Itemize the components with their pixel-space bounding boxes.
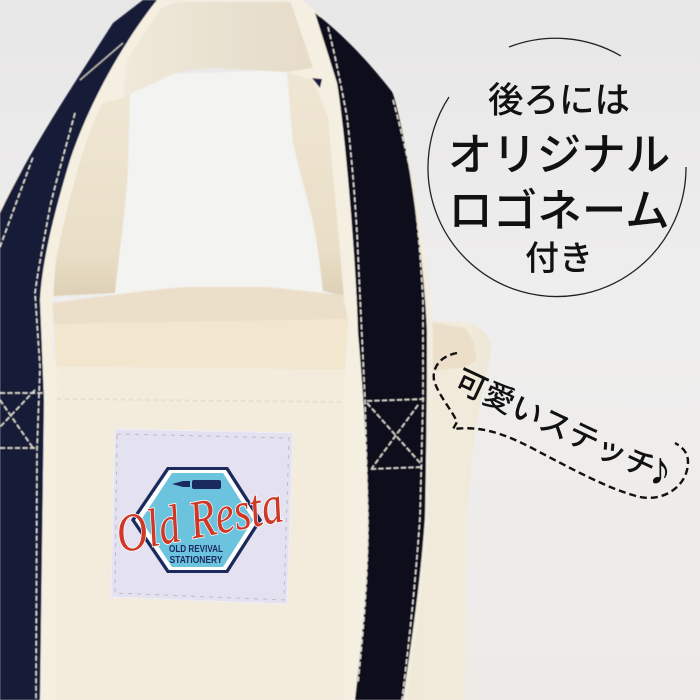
left cream edge strip bbox=[38, 0, 178, 700]
woven label bbox=[111, 429, 293, 604]
stitched X: left bbox=[0, 390, 43, 448]
outer right cream edge bbox=[393, 90, 433, 700]
front panel bbox=[38, 366, 372, 700]
stitching bbox=[0, 27, 424, 700]
icon: fountain pen bbox=[172, 480, 221, 489]
back handle: right lining bbox=[287, 72, 344, 296]
label patch bbox=[111, 429, 293, 604]
bag interior bbox=[54, 319, 352, 375]
callout text: オリジナル bbox=[448, 131, 670, 180]
music note: ♪ bbox=[648, 442, 672, 494]
circle outline bbox=[428, 38, 686, 297]
right cream edge strip bbox=[287, 0, 368, 700]
stitch text: 可愛いステッチ bbox=[449, 363, 661, 486]
logo script: Old Resta: Old Resta bbox=[111, 474, 288, 565]
callout text: 後ろには bbox=[488, 80, 630, 120]
callout circle bbox=[428, 38, 686, 297]
tote bag bbox=[0, 0, 491, 700]
callout text: 付き bbox=[525, 240, 593, 278]
navy tab under handle bbox=[312, 78, 322, 88]
side gusset bbox=[395, 320, 491, 700]
bag inner rim bbox=[52, 287, 348, 325]
callout text: ロゴネーム bbox=[448, 187, 670, 236]
woven label: STATIONERY bbox=[170, 555, 223, 566]
label stitching bbox=[115, 434, 289, 600]
stitched X: right bbox=[367, 399, 424, 469]
outer left cream edge bbox=[0, 120, 60, 250]
handle top band bbox=[103, 0, 320, 103]
right navy strap bbox=[315, 13, 427, 700]
stitch callout bbox=[434, 353, 688, 498]
dashed speech line bbox=[434, 353, 688, 498]
back handle: left lining bbox=[53, 93, 130, 296]
hexagon badge bbox=[131, 467, 262, 573]
handle window backdrop bbox=[110, 70, 345, 300]
left navy strap bbox=[0, 0, 157, 700]
panel stitching bbox=[57, 399, 345, 402]
gusset opening bbox=[428, 322, 477, 372]
slit in left strap bbox=[80, 43, 123, 80]
logo tagline: OLD REVIVAL bbox=[169, 544, 223, 555]
callout text bbox=[448, 80, 670, 278]
